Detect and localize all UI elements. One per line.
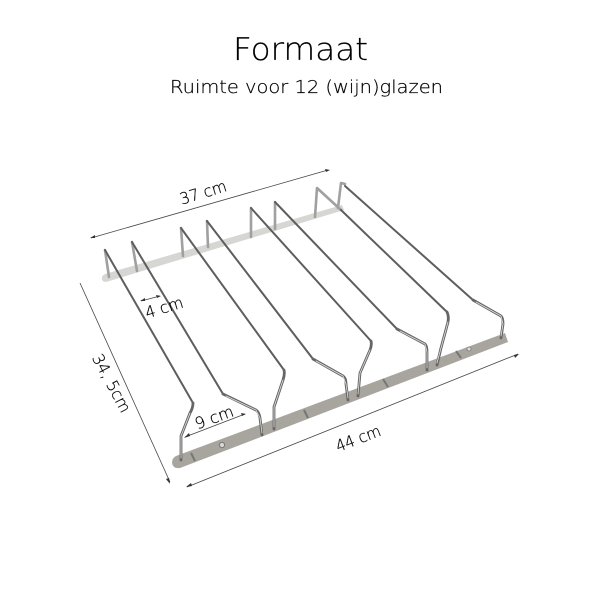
dimension: 37 cm: 37 cm [177, 176, 229, 209]
wire 5 [251, 208, 371, 396]
dimension: 37 cm [90, 169, 330, 238]
dimension: 34,5 cm: 34, 5cm [88, 351, 135, 416]
bar notches [191, 351, 461, 461]
dimension: 9 cm: 9 cm [192, 402, 236, 433]
dimension: 44 cm: 44 cm [333, 421, 384, 456]
dimension: 34,5 cm [80, 283, 170, 484]
wire 2 [132, 242, 262, 435]
wine glass rack [102, 183, 508, 468]
dimension: 9 cm [184, 402, 246, 438]
wire 3 [181, 228, 284, 429]
front mounting bar [172, 333, 508, 468]
wire 8 [338, 183, 503, 338]
wire 6 [275, 202, 427, 370]
subtitle: Ruimte voor 12 (wijn)glazen [170, 77, 443, 98]
wire 1 [105, 250, 193, 460]
rear screw [467, 347, 471, 351]
wire 7 [315, 188, 448, 365]
wire 4 [207, 221, 348, 400]
back mounting bar [102, 205, 344, 282]
dimension: 44 cm [186, 354, 519, 487]
title: Formaat [233, 32, 368, 68]
dimension: 4 cm: 4 cm [143, 293, 186, 322]
front bar screw [219, 442, 225, 448]
